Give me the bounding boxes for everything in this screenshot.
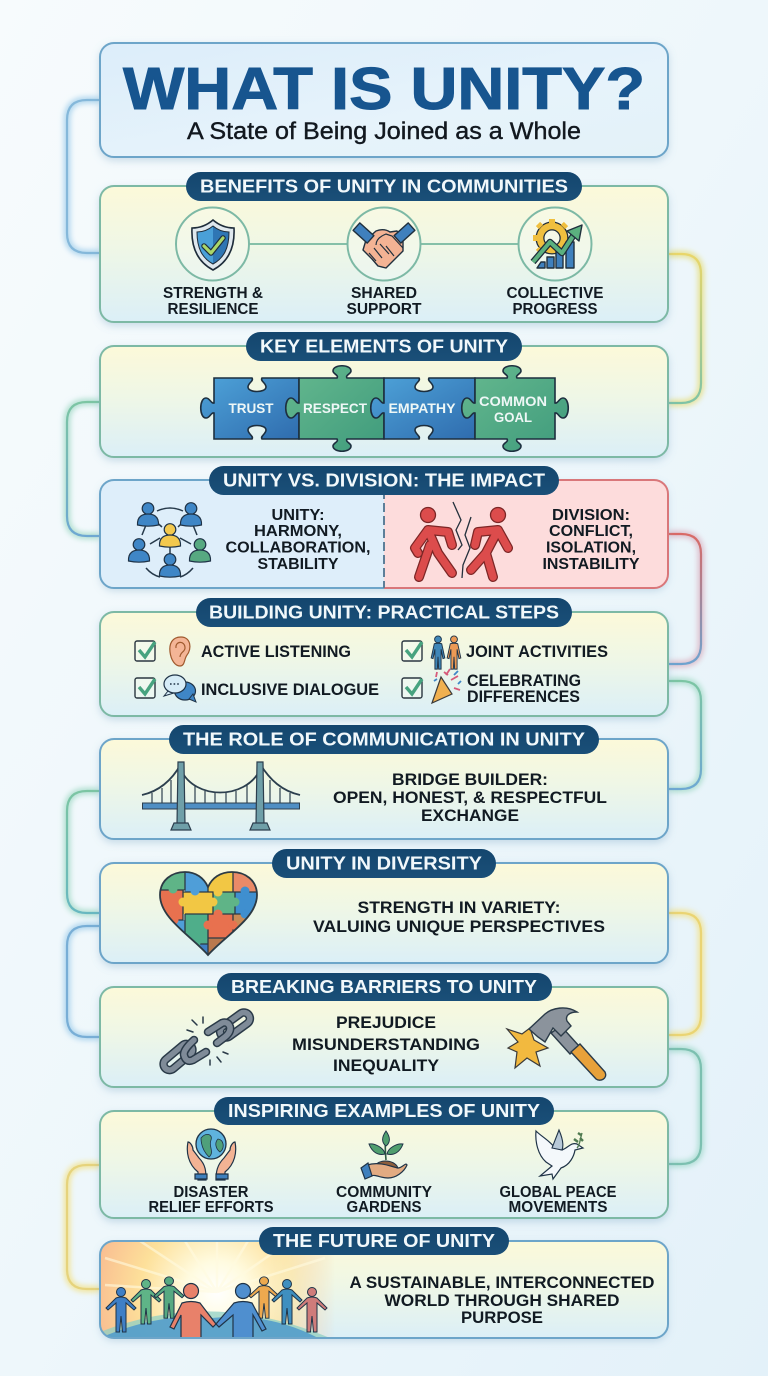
text: strength in variety [313, 898, 605, 936]
labels: benefits: SHARED [351, 285, 417, 302]
text: sustainable world: WORLD THROUGH SHARED [384, 1291, 620, 1310]
icon: ear [170, 637, 190, 666]
heading: breaking barriers [217, 973, 552, 1001]
text: celebrating differences: DIFFERENCES [467, 688, 580, 706]
heading: unity vs division [209, 466, 559, 495]
heading: key elements: KEY ELEMENTS OF UNITY [260, 336, 509, 356]
text: unity: UNITY: [272, 507, 324, 524]
labels: benefits: RESILIENCE [168, 301, 258, 318]
panel: title [100, 43, 668, 157]
text: barriers: INEQUALITY [333, 1056, 440, 1075]
connector: benefits to key elements [668, 254, 701, 403]
text: celebrating differences [467, 672, 581, 706]
text: global peace [500, 1184, 616, 1216]
text: global peace: MOVEMENTS [508, 1199, 608, 1216]
text: bridge builder: EXCHANGE [421, 806, 519, 825]
text: celebrating differences: CELEBRATING [467, 672, 581, 690]
text: global peace: GLOBAL PEACE [500, 1184, 616, 1201]
text: disaster relief: RELIEF EFFORTS [148, 1199, 274, 1216]
text: community gardens [336, 1184, 433, 1216]
panel: key elements [100, 346, 668, 457]
panel: building unity [100, 612, 668, 716]
connector: breaking to inspiring [668, 1049, 701, 1164]
heading: future: THE FUTURE OF UNITY [273, 1230, 496, 1251]
text: disaster relief: DISASTER [174, 1184, 248, 1201]
icon: shield [176, 208, 249, 280]
puzzle: trust [201, 378, 299, 439]
icon: globe in hands [187, 1129, 236, 1180]
text: community gardens: COMMUNITY [336, 1184, 433, 1201]
checkboxes [135, 641, 422, 698]
icon: speech bubbles [164, 675, 196, 702]
labels: benefits: PROGRESS [512, 301, 598, 318]
text: barriers: MISUNDERSTANDING [292, 1035, 480, 1054]
text: unity: HARMONY, [254, 523, 342, 540]
icon: seedling in hand [361, 1131, 407, 1179]
heading: benefits [186, 172, 582, 201]
connector: diversity to breaking right [668, 913, 701, 1035]
panel: benefits of unity [100, 186, 668, 322]
icon: broken chain [161, 1010, 252, 1073]
heading: unity in diversity [272, 849, 496, 878]
puzzle: common goal [462, 366, 568, 451]
heading: building unity [196, 598, 572, 627]
labels: benefits: COLLECTIVE [506, 285, 604, 302]
icon: party popper [432, 669, 461, 703]
text: division [542, 507, 640, 573]
heading: future [259, 1227, 509, 1255]
icon: connected people network [128, 503, 211, 577]
heading: inspiring examples [214, 1097, 554, 1125]
connecting line between benefit icons [249, 243, 519, 245]
icon: gear and growth chart [518, 208, 592, 280]
title: WHAT IS UNITY? [123, 56, 645, 122]
icon: bridge [142, 762, 300, 830]
puzzle: respect [286, 366, 384, 451]
text: disaster relief [148, 1184, 274, 1216]
icon: hammer [507, 1008, 606, 1080]
labels: benefits: STRENGTH & [163, 285, 263, 302]
connector: building to communication [668, 681, 701, 789]
connector: inspiring to future [67, 1165, 100, 1289]
panel: inspiring examples [100, 1111, 668, 1218]
connector: key elements to unity vs division [67, 402, 100, 536]
text: bridge builder: OPEN, HONEST, & RESPECTFUL [333, 788, 607, 807]
text: unity [226, 507, 370, 573]
labels: benefits [163, 285, 604, 318]
icon: divided figures [415, 502, 508, 578]
connector: diversity to breaking [67, 926, 100, 1037]
text: barriers [292, 1013, 480, 1075]
illustration: people under the sun [100, 1241, 340, 1340]
text: bridge builder [333, 770, 607, 825]
text: unity: STABILITY [258, 556, 339, 573]
text: inclusive dialogue: INCLUSIVE DIALOGUE [201, 681, 379, 699]
panel: unity in diversity [100, 863, 668, 963]
puzzle: trust: TRUST [228, 400, 274, 416]
text: division: DIVISION: [552, 507, 630, 524]
text: joint activities: JOINT ACTIVITIES [466, 643, 608, 661]
puzzle: empathy [371, 378, 475, 439]
heading: building unity: BUILDING UNITY: PRACTICAL STEPS [209, 602, 559, 622]
text: sustainable world: A SUSTAINABLE, INTERCONNECTED [350, 1273, 654, 1292]
heading: breaking barriers: BREAKING BARRIERS TO UNITY [231, 976, 538, 997]
heading: benefits: BENEFITS OF UNITY IN COMMUNITIES [200, 176, 568, 196]
puzzle: respect: RESPECT [303, 400, 367, 416]
text: strength in variety: STRENGTH IN VARIETY: [358, 898, 560, 917]
panel: breaking barriers [100, 987, 668, 1087]
icon: handshake [348, 208, 420, 280]
puzzle: common goal: GOAL [494, 409, 532, 425]
text: division: INSTABILITY [542, 556, 640, 573]
text: unity: COLLABORATION, [226, 540, 370, 556]
panel: unity vs division [100, 480, 668, 588]
puzzle: common goal: COMMON [479, 393, 547, 409]
icon: puzzle heart [159, 871, 258, 956]
text: barriers: PREJUDICE [336, 1013, 436, 1032]
text: strength in variety: VALUING UNIQUE PERSPECTIVES [313, 917, 605, 936]
text: bridge builder: BRIDGE BUILDER: [392, 770, 548, 789]
panel: role of communication [100, 739, 668, 839]
text: division: CONFLICT, [549, 523, 633, 540]
heading: key elements [246, 332, 522, 361]
heading: unity in diversity: UNITY IN DIVERSITY [286, 852, 483, 874]
heading: communication [169, 725, 599, 754]
subtitle: A State of Being Joined as a Whole [187, 118, 581, 145]
heading: inspiring examples: INSPIRING EXAMPLES OF UNITY [228, 1100, 541, 1121]
heading: unity vs division: UNITY VS. DIVISION: THE IMPACT [223, 470, 546, 490]
text: community gardens: GARDENS [346, 1199, 422, 1216]
text: sustainable world [350, 1273, 654, 1327]
puzzle: empathy: EMPATHY [388, 400, 456, 416]
heading: communication: THE ROLE OF COMMUNICATION IN UNITY [183, 728, 586, 750]
labels: benefits: SUPPORT [346, 301, 422, 318]
panel: future of unity [100, 1241, 668, 1340]
connector: title to benefits [67, 100, 100, 253]
connector: unity vs division to building [668, 534, 701, 664]
text: sustainable world: PURPOSE [461, 1308, 543, 1327]
text: active listening: ACTIVE LISTENING [201, 643, 351, 661]
connector: communication to diversity [67, 791, 100, 913]
icon: two people holding hands [431, 636, 461, 669]
icon: dove [536, 1130, 583, 1179]
text: division: ISOLATION, [546, 540, 636, 556]
